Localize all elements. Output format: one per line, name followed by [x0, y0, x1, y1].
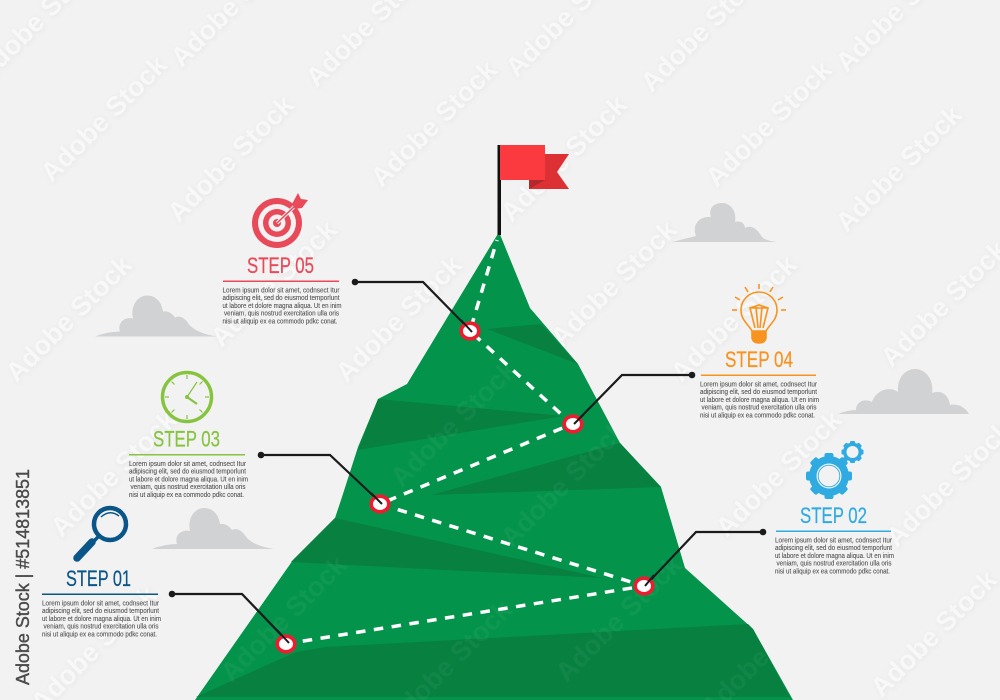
body text: nisi ut aliquip ex ea commodo pdkc conat. — [129, 492, 244, 499]
watermark pattern: Adobe Stock — [330, 249, 468, 388]
flag fold — [529, 180, 545, 189]
body text: ut labore et dolore magna aliqua. Ut en inim — [700, 397, 819, 404]
step 05 — [222, 193, 342, 325]
body text: ut labore et dolore magna aliqua. Ut en inim — [129, 476, 248, 483]
facet: upper right shadow — [487, 324, 578, 364]
watermark pattern: Adobe Stock — [710, 404, 848, 543]
cloud: left — [95, 296, 217, 336]
watermark pattern: Adobe Stock — [495, 89, 633, 228]
body text — [700, 382, 819, 419]
rule — [223, 280, 339, 282]
body text: adipiscing elit, sed do eiusmod temporlunt — [42, 608, 159, 615]
heading: STEP 04 — [725, 347, 793, 372]
facet: base shadow — [196, 624, 790, 697]
heading: STEP 03 — [153, 426, 220, 452]
body text: Lorem ipsum dolor sit amet, codnsect Itur — [129, 461, 247, 468]
watermark pattern: Adobe Stock — [0, 249, 138, 388]
body text: veniam, quis nostrud exercitation ulla oris — [702, 405, 817, 412]
facet: right shadow — [431, 443, 661, 495]
body text: Lorem ipsum dolor sit amet, codnsect Itur — [222, 288, 340, 294]
route markers — [277, 323, 653, 652]
flag pole — [498, 145, 501, 235]
body text — [775, 538, 894, 575]
cloud: lower left — [152, 508, 274, 549]
icon: gears — [806, 441, 864, 499]
step 01 — [42, 508, 161, 638]
watermark on mountain: Adobe Stock — [215, 549, 353, 688]
flag — [498, 145, 569, 235]
watermark on mountain: Adobe Stock — [495, 414, 633, 553]
stock id vertical text: Adobe Stock | #514813851 — [12, 469, 33, 685]
icon: light bulb — [732, 284, 786, 343]
body text: veniam, quis nostrud exercitation ulla oris — [130, 484, 246, 491]
watermark pattern: Adobe Stock — [205, 214, 343, 353]
watermark pattern: Adobe Stock — [365, 54, 503, 193]
rule — [42, 594, 158, 595]
step 04 — [700, 284, 819, 419]
leader lines — [172, 282, 763, 643]
facet: middle left shadow — [291, 518, 602, 578]
rule — [776, 530, 891, 532]
body text: nisi ut aliquip ex ea commodo pdkc conat. — [222, 318, 338, 325]
flag ribbon — [529, 154, 569, 189]
body text: adipiscing elit, sed do eiusmod temporlunt — [700, 389, 817, 396]
watermark on mountain: Adobe Stock — [385, 354, 523, 493]
rule — [129, 454, 245, 456]
body text: adipiscing elit, sed do eiusmod temporlunt — [222, 295, 340, 302]
watermark pattern: Adobe Stock — [162, 89, 300, 228]
leader tips over markers — [277, 320, 654, 643]
icon: magnifier — [77, 508, 126, 558]
body text: ut labore et dolore magna aliqua. Ut en inim — [222, 303, 342, 310]
heading: STEP 02 — [800, 503, 867, 528]
body text: nisi ut aliquip ex ea commodo pdkc conat. — [775, 568, 890, 575]
body text: ut labore et dolore magna aliqua. Ut en inim — [42, 616, 161, 623]
watermark pattern: Adobe Stock — [700, 54, 838, 193]
body text: Lorem ipsum dolor sit amet, codnsect Itur — [775, 538, 893, 544]
cloud: top right — [672, 203, 778, 242]
heading: STEP 05 — [247, 253, 314, 278]
body text — [129, 461, 248, 499]
watermark pattern: Adobe Stock — [665, 249, 803, 388]
body text: Lorem ipsum dolor sit amet, codnsect Itur — [700, 382, 818, 388]
mountain — [195, 232, 833, 700]
leader dots — [169, 279, 766, 597]
body text: Lorem ipsum dolor sit amet, codnsect Itur — [42, 600, 160, 608]
rule — [701, 374, 816, 376]
watermark pattern: Adobe Stock — [830, 99, 968, 238]
body text: adipiscing elit, sed do eiusmod temporlunt — [775, 545, 892, 552]
body text: veniam, quis nostrud exercitation ulla oris — [776, 561, 892, 568]
body text: veniam, quis nostrud exercitation ulla oris — [224, 311, 339, 318]
body text: veniam, quis nostrud exercitation ulla oris — [44, 624, 159, 631]
heading: STEP 01 — [66, 566, 131, 591]
body text: adipiscing elit, sed do eiusmod temporlunt — [129, 469, 246, 476]
watermark pattern: Adobe Stock — [545, 214, 683, 353]
body text: nisi ut aliquip ex ea commodo pdkc conat. — [700, 412, 815, 419]
mountain body — [195, 232, 793, 700]
body text: ut labore et dolore magna aliqua. Ut en inim — [775, 553, 894, 560]
icon: clock — [162, 372, 212, 422]
icon: target — [252, 193, 308, 248]
body text — [222, 288, 342, 325]
body text: nisi ut aliquip ex ea commodo pdkc conat. — [42, 631, 157, 638]
dashed route — [285, 240, 644, 644]
watermark pattern: Adobe Stock — [35, 49, 173, 188]
body text — [42, 600, 161, 638]
watermark on mountain — [215, 354, 833, 700]
flag cloth — [500, 145, 545, 180]
watermark on mountain: Adobe Stock — [550, 549, 688, 688]
cloud: right — [838, 369, 969, 414]
step 02 — [775, 441, 894, 575]
facet: upper left shadow — [358, 399, 563, 450]
step 03 — [129, 372, 248, 499]
watermark pattern: Adobe Stock — [45, 404, 183, 543]
